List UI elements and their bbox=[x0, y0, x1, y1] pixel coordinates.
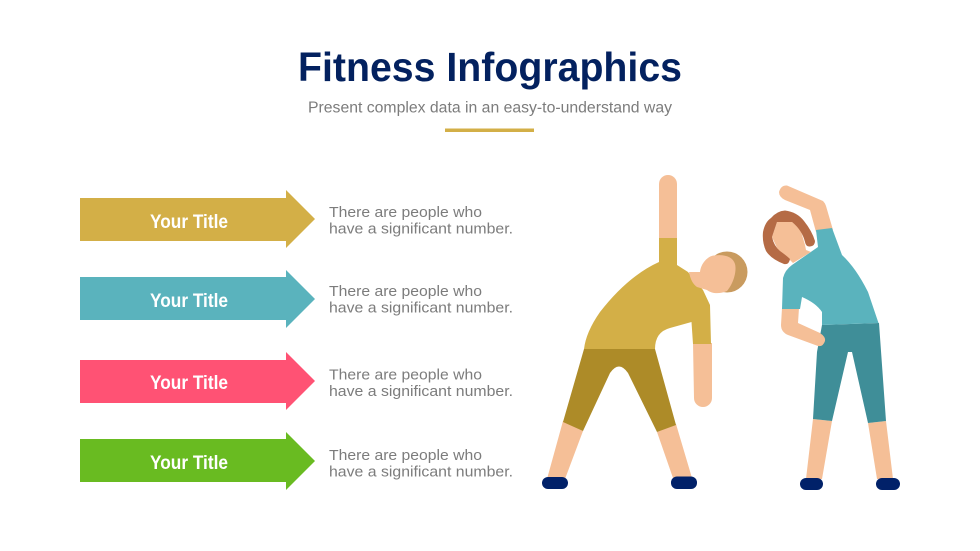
man shorts bbox=[563, 349, 676, 432]
description 1: have a significant number. bbox=[329, 220, 513, 238]
arrow: green bbox=[80, 432, 315, 490]
man legs bbox=[547, 421, 692, 479]
description 3: There are people who bbox=[329, 366, 482, 384]
man hair bbox=[706, 252, 748, 292]
title: Fitness Infographics bbox=[298, 44, 682, 90]
row 3: pink arrow and text bbox=[80, 352, 513, 410]
description 4: have a significant number. bbox=[329, 464, 513, 480]
woman shirt bbox=[782, 228, 878, 325]
woman hair bbox=[763, 210, 815, 264]
woman legs bbox=[806, 419, 893, 479]
woman lower arm bbox=[781, 308, 825, 346]
row 4: green arrow and text bbox=[80, 432, 513, 490]
arrow label 3: Your Title bbox=[150, 372, 228, 394]
arrow label 2: Your Title bbox=[150, 290, 228, 312]
description 2: There are people who bbox=[329, 283, 482, 300]
figure: man stretching bbox=[542, 175, 748, 489]
man head and neck bbox=[689, 255, 736, 293]
row 2: teal arrow and text bbox=[80, 270, 513, 328]
subtitle: Present complex data in an easy-to-understand way bbox=[308, 100, 672, 116]
arrow label 4: Your Title bbox=[150, 452, 228, 474]
man shirt bbox=[584, 238, 711, 349]
description 1: There are people who bbox=[329, 204, 482, 221]
woman raised arm bbox=[779, 185, 833, 232]
woman right shoe bbox=[876, 478, 900, 490]
arrow: gold bbox=[80, 190, 315, 248]
man right shoe bbox=[671, 476, 697, 489]
arrow: teal bbox=[80, 270, 315, 328]
woman face and neck bbox=[772, 222, 811, 263]
woman shorts bbox=[813, 323, 886, 423]
figure: woman stretching bbox=[763, 185, 900, 490]
arrow label 1: Your Title bbox=[150, 211, 228, 233]
description 3: have a significant number. bbox=[329, 383, 513, 400]
arrow: pink bbox=[80, 352, 315, 410]
woman left shoe bbox=[800, 478, 823, 490]
description 4: There are people who bbox=[329, 447, 482, 464]
row 1: gold arrow and text bbox=[80, 190, 513, 248]
description 2: have a significant number. bbox=[329, 300, 513, 316]
man left shoe bbox=[542, 477, 568, 489]
man raised arm bbox=[659, 175, 677, 240]
man lower arm bbox=[693, 343, 712, 407]
title underline bbox=[445, 128, 534, 132]
